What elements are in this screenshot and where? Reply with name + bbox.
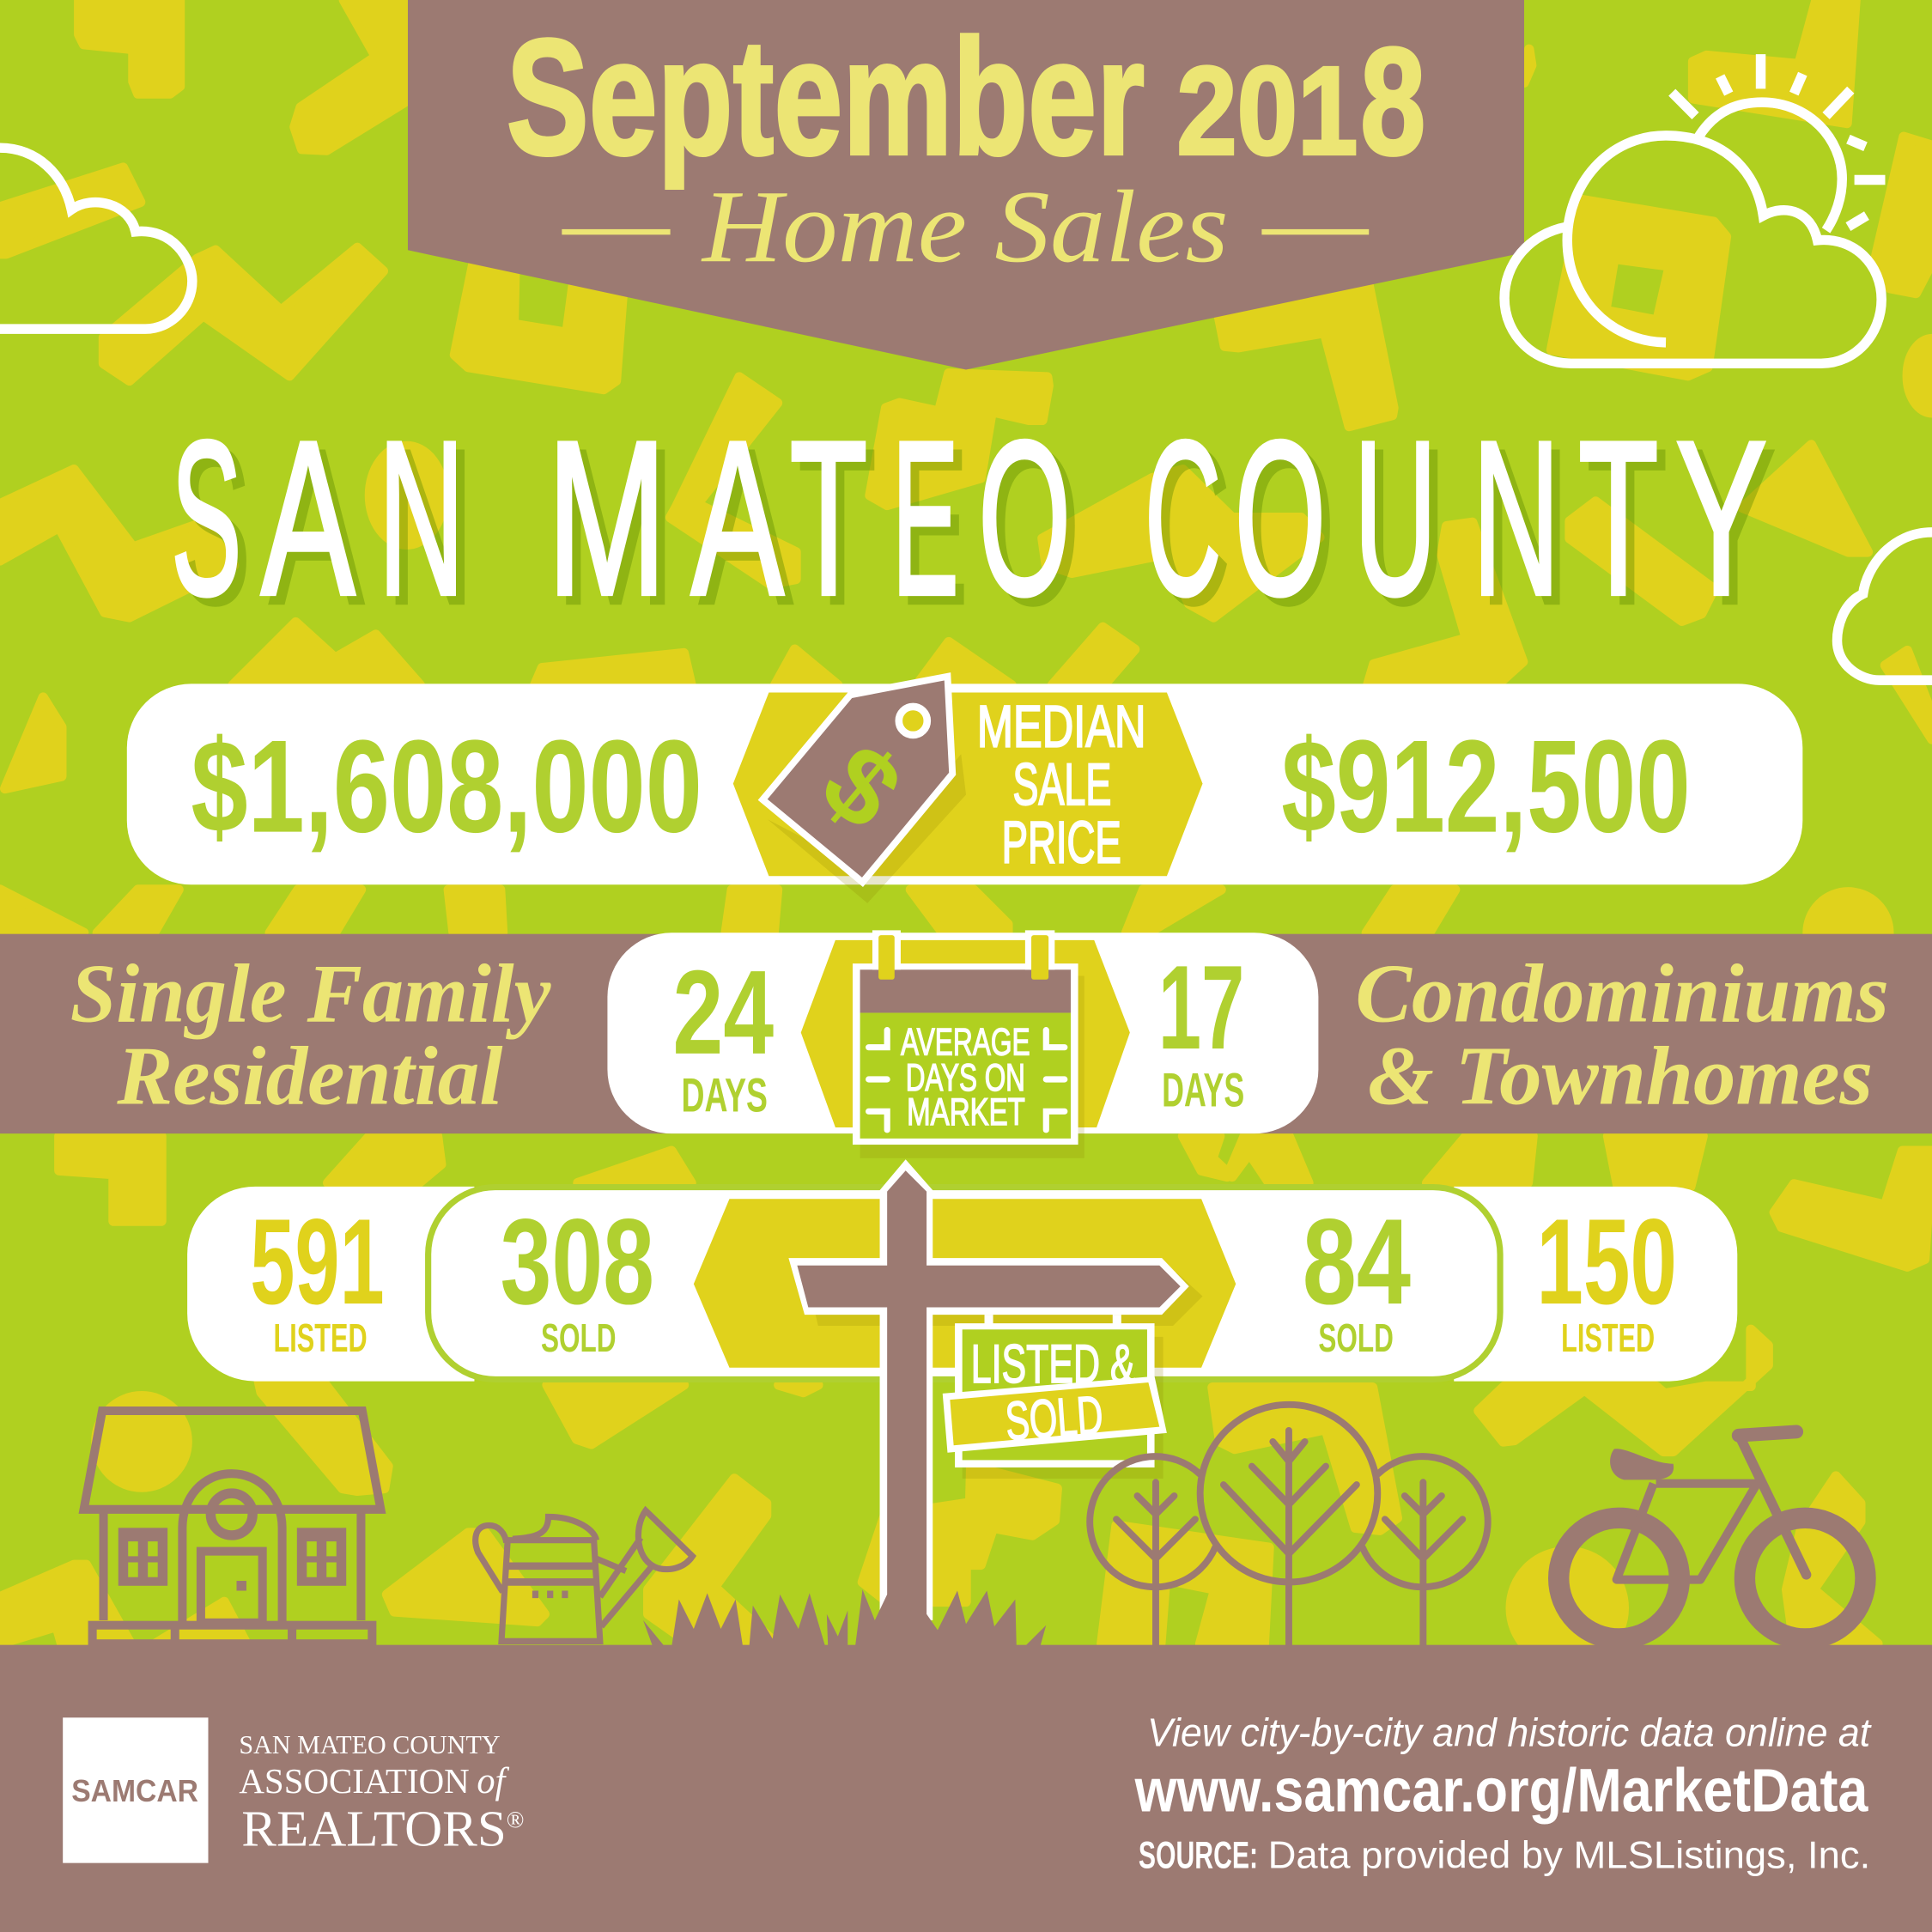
hanging sign: listed and sold: LISTED & (971, 1334, 1135, 1394)
heading: September 2018: September (507, 4, 1145, 189)
title: San Mateo County: C (1153, 405, 1230, 650)
stat: 24 days: DAYS (682, 1067, 768, 1121)
organization name: ASSOCIATION (239, 1762, 470, 1801)
title: San Mateo County: N (387, 405, 473, 650)
title: San Mateo County: C (1145, 397, 1221, 641)
stat: 308 sold: SOLD (541, 1315, 616, 1360)
label: median sale price (977, 694, 1146, 875)
title: San Mateo County: T (790, 397, 867, 641)
title: San Mateo County: M (547, 397, 666, 641)
logo: SAMCAR (63, 1717, 209, 1863)
label: single family residential: Single Family (70, 948, 551, 1041)
icon: price tag (762, 677, 966, 903)
banner (408, 0, 1524, 369)
label: median sale price: SALE (1013, 751, 1111, 817)
title: San Mateo County: U (1363, 405, 1445, 650)
title: San Mateo County: Y (1676, 397, 1767, 641)
footer (0, 1589, 1932, 1932)
title: San Mateo County: A (700, 405, 793, 650)
hanging sign: listed and sold: SOLD (1004, 1385, 1105, 1452)
title: San Mateo County: M (556, 405, 675, 650)
hanging sign: listed and sold (943, 1323, 1167, 1479)
stat: 591 listed: LISTED (274, 1315, 368, 1360)
title: San Mateo County: O (978, 397, 1071, 641)
calendar text (901, 1021, 1030, 1133)
panel: average days on market (607, 930, 1318, 1158)
label: condominiums and townhomes (1355, 948, 1889, 1123)
calendar text: AVERAGE (901, 1021, 1030, 1063)
icon: house (84, 1411, 380, 1643)
organization name: SAN MATEO COUNTY (239, 1730, 501, 1759)
calendar text: MARKET (907, 1091, 1025, 1133)
band: property types (0, 934, 1932, 1133)
label: median sale price: PRICE (1002, 809, 1121, 875)
calendar text: DAYS ON (906, 1057, 1025, 1099)
icon: calendar (853, 930, 1084, 1158)
stat: 308 sold: 308 (501, 1194, 654, 1330)
title: San Mateo County: T (1587, 405, 1667, 650)
call to action: SOURCE: (1139, 1834, 1258, 1876)
organization name: REALTORS (241, 1801, 507, 1857)
stat: 17 days (1158, 941, 1244, 1117)
panel: median sale price (127, 677, 1802, 903)
subheading: Home Sales: Home Sales (701, 170, 1229, 284)
icon: price tag: $ (800, 720, 924, 852)
icon: right edge cloud (1838, 532, 1932, 680)
single family price: $1,608,000 (191, 713, 702, 860)
title: San Mateo County: S (171, 397, 241, 641)
title: San Mateo County: T (799, 405, 876, 650)
label: condominiums and townhomes: & Townhomes (1368, 1030, 1873, 1123)
panel: listed and sold (187, 1187, 1737, 1382)
heading: September 2018: 8 (1360, 15, 1425, 186)
stat: 24 days (672, 946, 774, 1121)
stat: 591 listed: 591 (250, 1194, 385, 1330)
title: San Mateo County: T (1578, 397, 1658, 641)
icon: bicycle (1558, 1431, 1866, 1638)
stat: 84 sold (1303, 1194, 1411, 1360)
stat: 84 sold: SOLD (1318, 1315, 1394, 1360)
heading: September 2018: 201 (1176, 41, 1358, 181)
stat: 591 listed (250, 1194, 385, 1360)
title: San Mateo County: E (901, 405, 967, 650)
icon: trees (1090, 1405, 1488, 1646)
call to action: Data provided by MLSListings, Inc. (1268, 1834, 1870, 1876)
icon: left cloud (0, 148, 192, 329)
title: San Mateo County (171, 397, 1776, 650)
stat: 84 sold: 84 (1303, 1194, 1411, 1330)
grass (643, 1589, 1046, 1648)
title: San Mateo County: O (987, 405, 1079, 650)
call to action (1134, 1710, 1872, 1876)
stat: 150 listed (1536, 1194, 1677, 1360)
icon: watering can (476, 1510, 692, 1641)
stat: 150 listed: LISTED (1561, 1315, 1655, 1360)
icon: sun and cloud (1504, 54, 1885, 363)
title: San Mateo County: A (261, 397, 355, 641)
title: San Mateo County: S (180, 405, 250, 650)
title: San Mateo County: N (379, 397, 465, 641)
label: median sale price: MEDIAN (977, 694, 1146, 760)
title: San Mateo County: A (691, 397, 784, 641)
label: condominiums and townhomes: Condominiums (1355, 948, 1889, 1041)
subheading dashes (562, 229, 1369, 234)
title: San Mateo County: N (1481, 405, 1569, 650)
label: single family residential: Residential (116, 1030, 502, 1123)
title: San Mateo County: Y (1685, 405, 1776, 650)
stat: 308 sold (501, 1194, 654, 1360)
title: San Mateo County: A (270, 405, 363, 650)
stat: 24 days: 24 (672, 946, 774, 1079)
stat: 150 listed: 150 (1536, 1194, 1677, 1330)
condo price: $912,500 (1281, 713, 1691, 860)
organization name: ® (507, 1807, 524, 1832)
title: San Mateo County: O (1235, 397, 1326, 641)
stat: 17 days: DAYS (1162, 1063, 1244, 1117)
stat: 17 days: 17 (1158, 941, 1244, 1074)
organization name: of (477, 1761, 509, 1801)
call to action: View city-by-city and historic data online at (1147, 1710, 1872, 1754)
title: San Mateo County: N (1473, 397, 1560, 641)
label: single family residential (70, 948, 551, 1123)
title: San Mateo County: U (1354, 397, 1437, 641)
organization name (239, 1730, 524, 1857)
logo: SAMCAR: SAMCAR (71, 1774, 198, 1808)
title: San Mateo County: E (892, 397, 958, 641)
signpost (788, 1159, 1203, 1626)
title: San Mateo County: O (1243, 405, 1334, 650)
